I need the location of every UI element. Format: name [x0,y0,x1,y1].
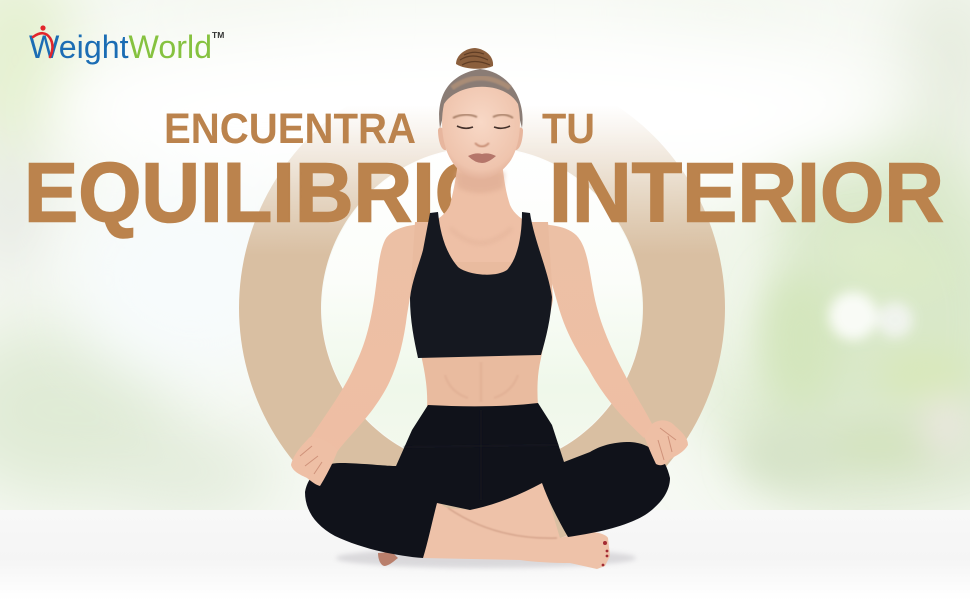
title word: INTERIOR: INTERIOR [549,145,944,239]
logo trademark: TM [212,30,224,40]
ears [438,128,523,150]
lips [468,153,496,163]
back foot [378,552,398,566]
left hand finger lines [300,446,322,474]
WeightWorld logo [29,25,224,65]
leggings folds [404,410,558,500]
torso skin [410,222,553,408]
eyebrows [453,115,513,118]
right arm [530,224,652,438]
title word: TU: TU [542,105,595,153]
beige ring [239,65,725,551]
neck shadow [455,172,505,193]
hair [439,69,523,128]
neck [428,160,532,262]
crossed thigh shadow line [448,508,557,538]
leg skin and foot [423,481,610,569]
right hand [644,420,688,465]
woman meditating [291,48,688,569]
hair highlight [452,78,510,88]
left arm [310,224,430,452]
floor shadow [336,548,636,568]
hair bun [456,48,493,69]
right hand finger lines [658,428,676,460]
floor [0,510,970,600]
logo figure [33,33,52,57]
inner ring backdrop [322,148,642,468]
midriff shading [445,362,518,402]
closed eyes [457,126,510,128]
black sports bra [410,212,552,358]
title word: EQUILIBRIO: EQUILIBRIO [24,145,498,239]
title line: ENCUENTRA: ENCUENTRA [164,105,416,153]
logo dot [40,25,46,31]
left hand [291,437,338,486]
chest shading [450,228,512,243]
face [442,87,520,180]
logo wordmark: WeightWorld [29,29,212,65]
black leggings [305,403,670,558]
nose [475,143,489,146]
toenails [602,541,608,566]
